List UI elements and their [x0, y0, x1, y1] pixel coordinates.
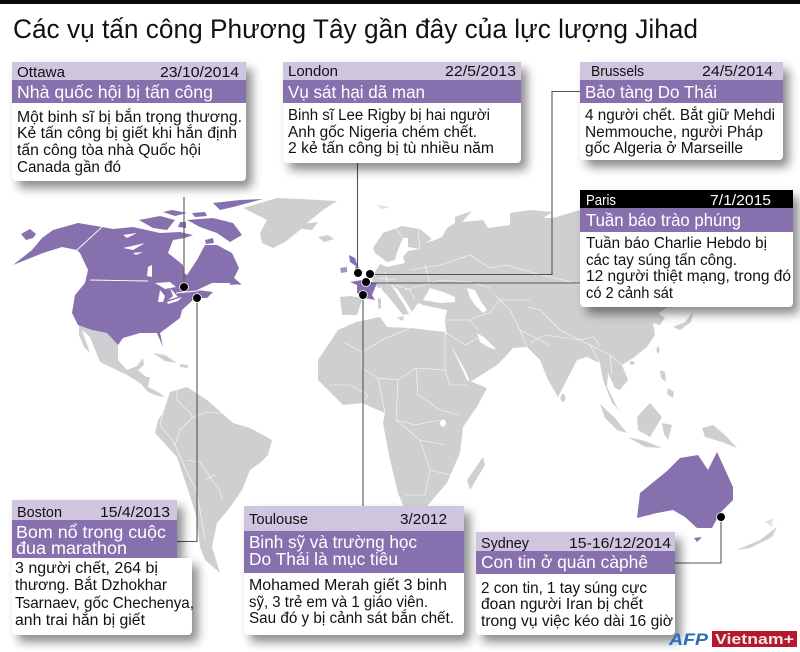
panel: Boston: Boston: [17, 504, 62, 521]
panel: Paris: Tuần báo Charlie Hebdo bị: [586, 235, 767, 252]
panel: Ottawa: 23/10/2014: [160, 64, 239, 81]
panel: Paris: có 2 cảnh sát: [586, 285, 674, 302]
highlighted countries: Canada, USA, UK, France, Australia: [13, 199, 733, 542]
panel: Paris: các tay súng tấn công.: [586, 252, 737, 269]
panel: Toulouse: Binh sỹ và trường học: [249, 532, 417, 552]
panel: Toulouse: Mohamed Merah giết 3 binh: [249, 577, 447, 594]
lakes and national borders within highlighted countries: [123, 233, 182, 304]
logo: Vietnam+: Vietnam+: [715, 632, 794, 648]
panel: London: Vụ sát hại dã man: [288, 82, 425, 102]
panel: London: Anh gốc Nigeria chém chết.: [288, 124, 477, 141]
panel: Boston: anh trai hắn bị giết: [15, 612, 146, 629]
panel: London: 2 kẻ tấn công bị tù nhiều năm: [288, 140, 494, 157]
panel: Toulouse: [244, 506, 464, 635]
panel: Ottawa: Ottawa: [17, 64, 66, 81]
panel: Paris: [580, 190, 793, 307]
panel: Brussels: 4 người chết. Bắt giữ Mehdi: [585, 107, 775, 124]
panel: London: [283, 62, 521, 163]
panel: Ottawa: Canada gần đó: [17, 159, 121, 176]
panel: Toulouse: Sau đó y bị cảnh sát bắn chết.: [249, 610, 454, 627]
panel: Paris: 7/1/2015: [710, 192, 771, 209]
panel: Boston: [12, 500, 194, 635]
panel: London: 22/5/2013: [445, 63, 516, 80]
panel: Paris: 12 người thiệt mạng, trong đó: [586, 268, 791, 285]
panel: Ottawa: Nhà quốc hội bị tấn công: [17, 82, 213, 102]
panel: Toulouse: 3/2012: [400, 511, 447, 528]
panel: Toulouse: Do Thái là mục tiêu: [249, 549, 398, 569]
panel: Ottawa: tấn công tòa nhà Quốc hội: [17, 142, 201, 159]
panel: Ottawa: [12, 62, 246, 181]
world map: [13, 198, 777, 573]
panel: Sydney: Con tin ở quán càphê: [481, 552, 648, 572]
panel: Paris: Tuần báo trào phúng: [586, 210, 741, 230]
panel: Toulouse: Toulouse: [249, 511, 308, 528]
panel: Brussels: [580, 62, 783, 160]
panel: Ottawa: Kẻ tấn công bị giết khi hắn định: [17, 125, 237, 142]
panel: London: London: [288, 63, 338, 80]
panel: Ottawa: Một binh sĩ bị bắn trọng thương.: [17, 109, 242, 126]
panel: Paris: Paris: [586, 192, 616, 209]
panel: Sydney: [476, 532, 675, 635]
top black rule: [0, 0, 800, 4]
country borders: [160, 228, 622, 540]
panel: Brussels: gốc Algeria ở Marseille: [585, 140, 743, 157]
panel: Boston: 15/4/2013: [100, 504, 170, 521]
inland seas: [423, 288, 497, 426]
panel: Brussels: Nemmouche, người Pháp: [585, 124, 763, 141]
panel: Brussels: Bảo tàng Do Thái: [585, 82, 717, 102]
title: Các vụ tấn công Phương Tây gần đây của lực lượng Jihad: [13, 14, 698, 44]
panel: Sydney: đoan người Iran bị chết: [481, 596, 644, 613]
panel: London: Binh sĩ Lee Rigby bị hai người: [288, 107, 490, 124]
panel: Sydney: 15-16/12/2014: [569, 535, 671, 552]
panel: Sydney: Sydney: [481, 535, 529, 552]
panel: Sydney: trong vụ việc kéo dài 16 giờ: [481, 613, 673, 630]
panel: Sydney: 2 con tin, 1 tay súng cực: [481, 580, 647, 597]
panel: Boston: 3 người chết, 264 bị: [15, 560, 158, 577]
connector lines: [177, 92, 721, 563]
panel: Boston: Bom nổ trong cuộc: [16, 522, 166, 542]
panel: Boston: đua marathon: [16, 538, 127, 558]
location markers: [180, 269, 725, 521]
panel: Boston: thương. Bắt Dzhokhar: [15, 577, 167, 594]
panel: Toulouse: sỹ, 3 trẻ em và 1 giáo viên.: [249, 594, 428, 611]
panel: Boston: Tsarnaev, gốc Chechenya,: [15, 595, 194, 612]
logo: AFP: AFP: [668, 630, 709, 649]
panel: Brussels: 24/5/2014: [702, 63, 773, 80]
panel: Brussels: Brussels: [591, 63, 644, 80]
landmass: grey continents: [79, 198, 777, 573]
